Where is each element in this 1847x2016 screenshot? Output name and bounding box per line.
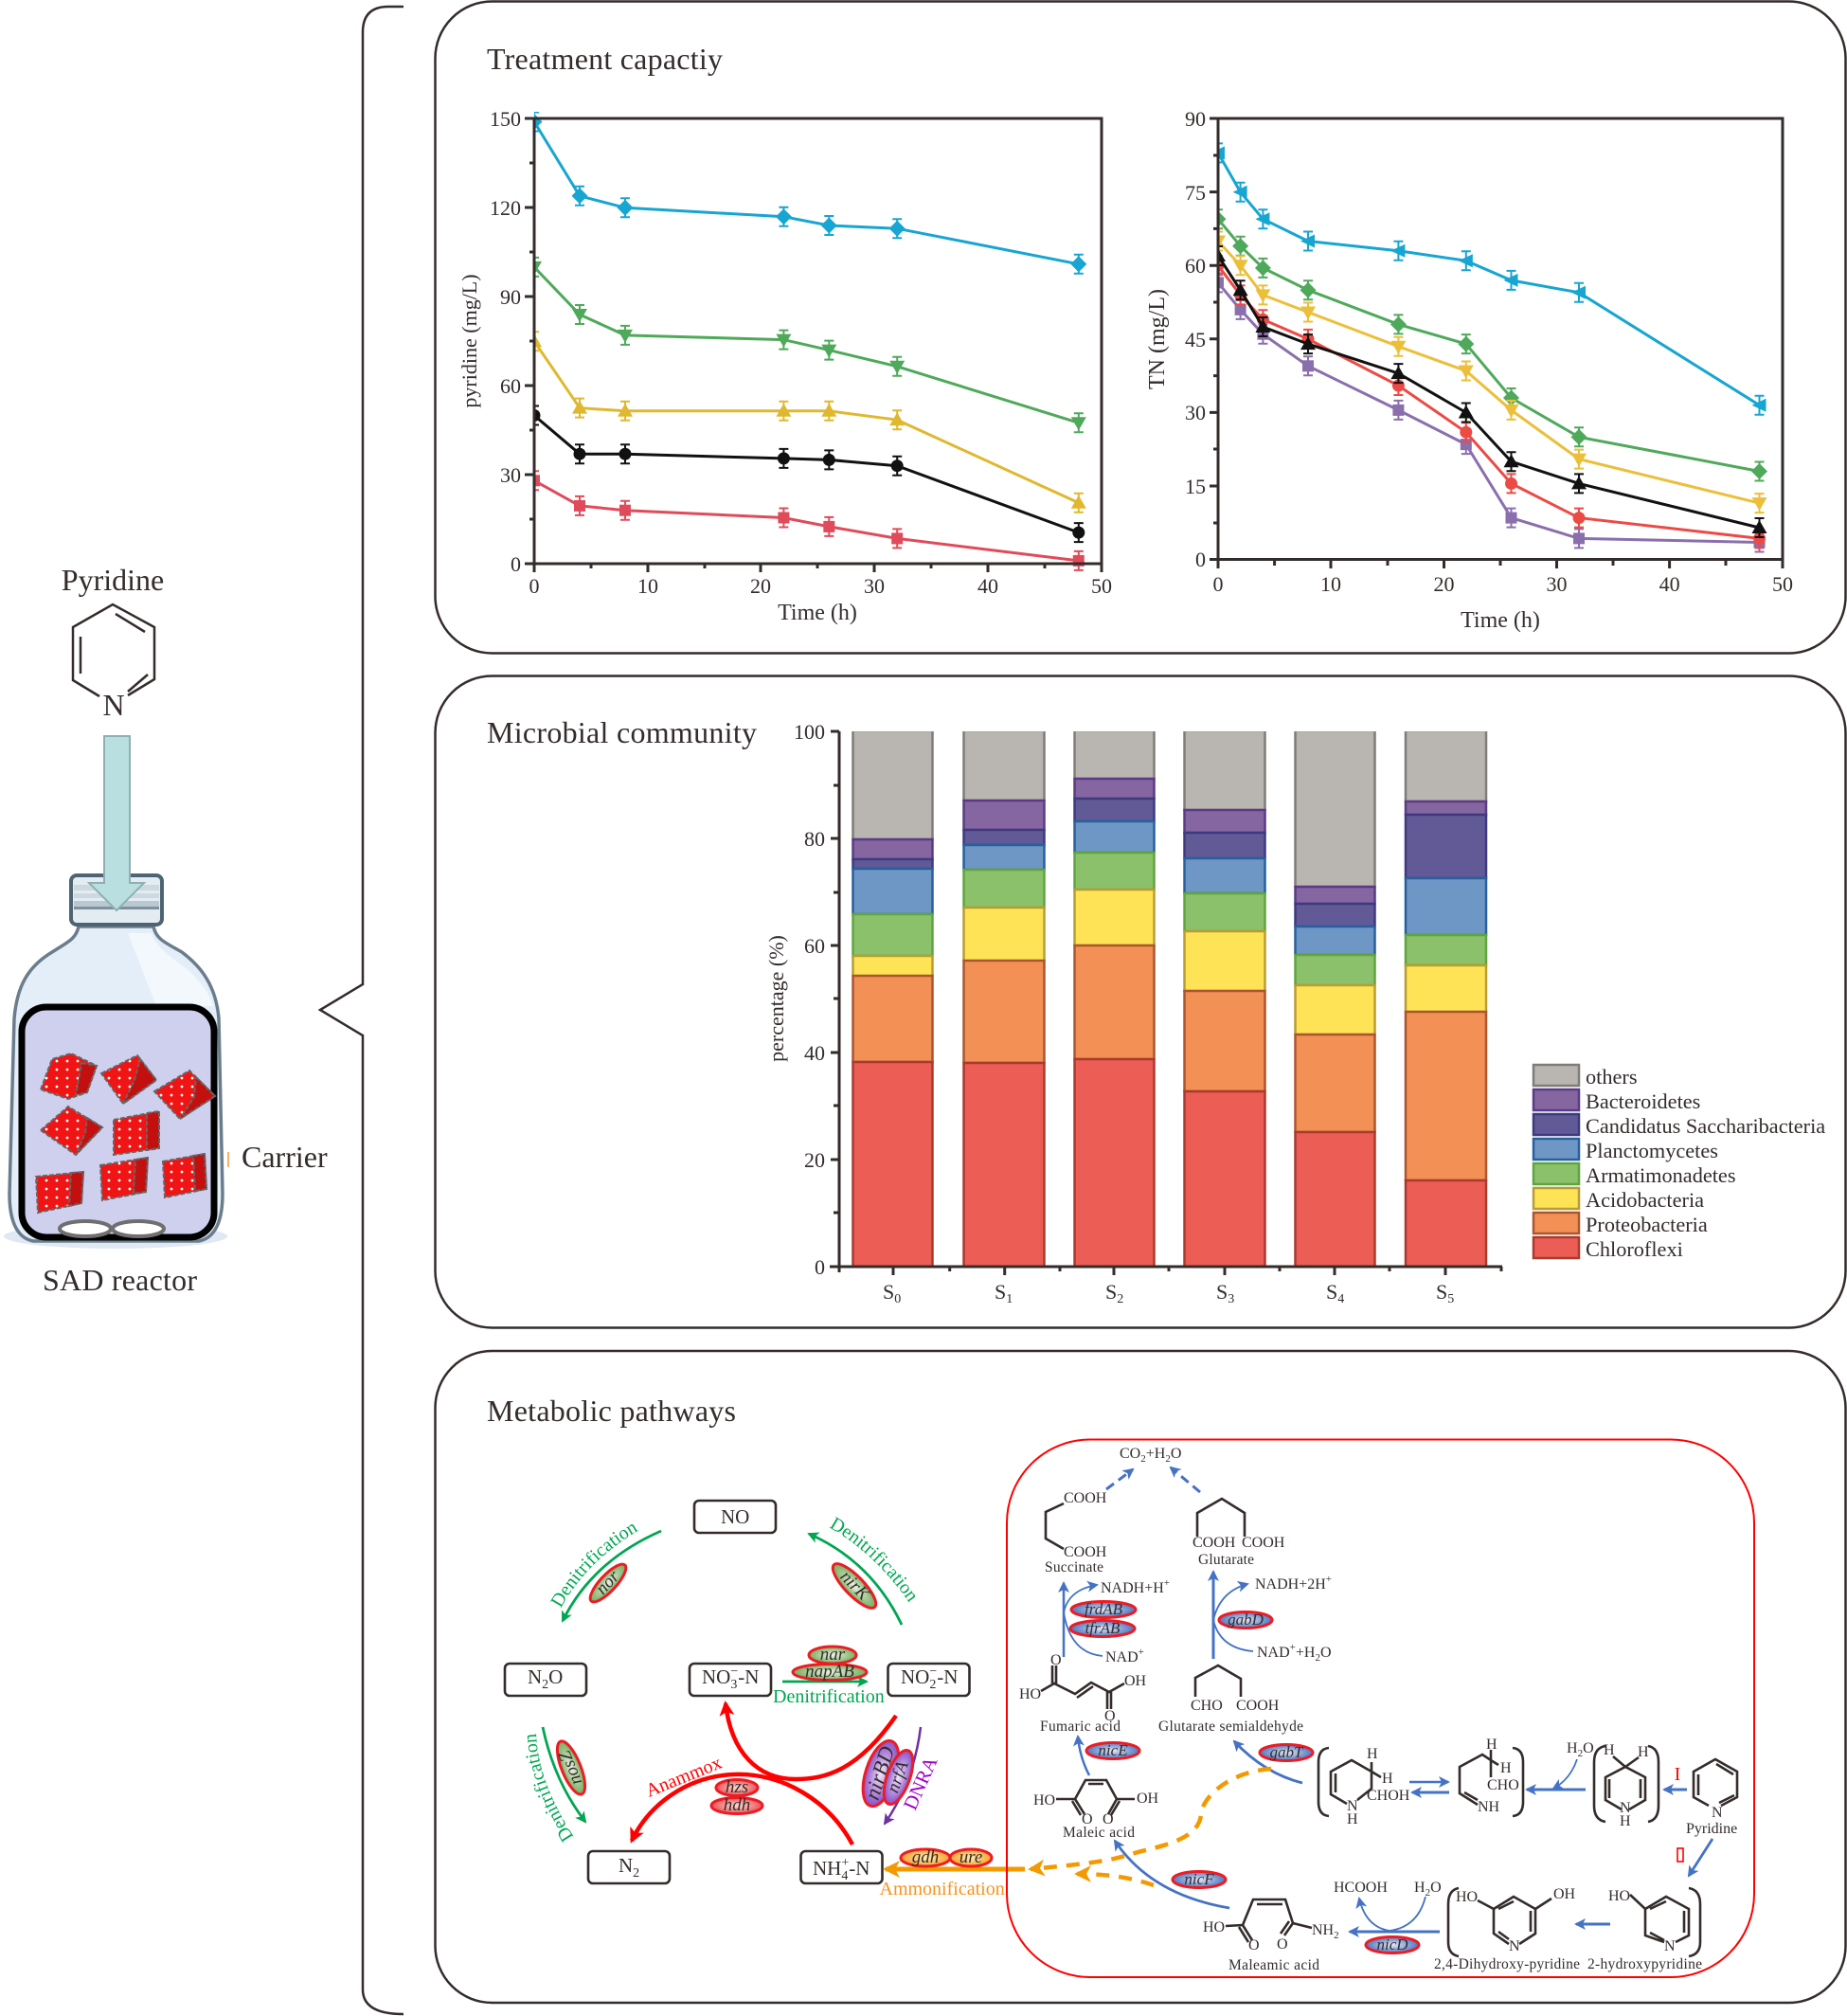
label: denitrification left: Denitrification: [527, 1734, 574, 1844]
box: NO: NO: [721, 1505, 749, 1528]
axis labels: [1145, 107, 1793, 633]
axis labels: S: [995, 1280, 1006, 1304]
enzyme: nicE: nicE: [1098, 1741, 1128, 1759]
enzyme: nosZ: [551, 1737, 591, 1798]
box: NO2-N: −: [929, 1665, 937, 1679]
label: anammox: Anammox: [643, 1753, 725, 1802]
intermediate: dihydropyridine: [1594, 1742, 1659, 1829]
enzyme: gdh: gdh: [912, 1847, 939, 1867]
box: NH4-N: NH: [813, 1857, 841, 1880]
axis labels: 75: [1185, 181, 1206, 205]
molecule: fumaric acid: HO: [1019, 1686, 1041, 1702]
box: NO2-N: [888, 1664, 970, 1696]
chart axes and ticks: [830, 731, 1502, 1275]
enzyme: tfrAB: tfrAB: [1085, 1619, 1121, 1637]
molecule: succinate: COOH: [1064, 1544, 1107, 1560]
label: Pyridine: Pyridine: [62, 563, 164, 597]
enzyme: nirBD: nirBD: [860, 1743, 899, 1803]
axis labels: 30: [500, 463, 521, 487]
box: NH4-N: +: [841, 1856, 849, 1870]
molecule: fumaric acid: O: [1050, 1652, 1062, 1668]
enzyme: frdAB: frdAB: [1085, 1600, 1123, 1618]
legend: others: [1586, 1065, 1637, 1089]
axis labels: 0: [511, 552, 521, 576]
axis labels: 30: [864, 574, 885, 598]
axis labels: pyridine (mg/L): [457, 274, 481, 408]
molecule: glutarate semialdehyde: Glutarate semialdehyde: [1158, 1719, 1303, 1735]
molecule: glutarate: [1192, 1499, 1285, 1568]
step: fumaric acid to succinate: NADH+H: [1101, 1580, 1164, 1596]
box: NO3-N: 3: [730, 1678, 737, 1692]
axis labels: 30: [1185, 401, 1206, 424]
arrow: to glutarate semialdehyde: [1234, 1741, 1302, 1783]
intermediate: dihydropyridine: H: [1604, 1742, 1615, 1758]
arrow: pathway I: [1664, 1764, 1687, 1790]
box: NO3-N: [690, 1664, 771, 1696]
arrow: NO2 to NO: [809, 1534, 902, 1625]
axis labels: 60: [804, 934, 825, 958]
chart: pyridine concentration over time: [457, 107, 1112, 625]
molecule: glutarate: COOH: [1242, 1535, 1285, 1551]
arrows: dashed to CO2: [1106, 1467, 1200, 1492]
label: denitrification centre: Denitrification: [773, 1686, 885, 1707]
molecule: glutarate: COOH: [1192, 1535, 1236, 1551]
series: black: [1210, 246, 1767, 537]
molecule: fumaric acid: Fumaric acid: [1040, 1719, 1121, 1735]
arrow: ammonification: [886, 1866, 1025, 1872]
molecule: maleamic acid: O: [1248, 1937, 1260, 1953]
intermediate: open chain: H: [1500, 1760, 1512, 1776]
nitrogen cycle: [504, 1499, 1025, 1899]
series: green: [527, 258, 1086, 432]
molecule: maleic acid: O: [1082, 1811, 1093, 1827]
molecule: maleic acid: Maleic acid: [1063, 1825, 1135, 1841]
bar: S2: [1074, 730, 1154, 1267]
enzyme: nor: nor: [592, 1566, 624, 1598]
label: denitrification top left: Denitrification: [549, 1524, 638, 1609]
molecule: succinate: [1045, 1490, 1107, 1575]
arrow: hydration step: O: [1583, 1740, 1594, 1756]
arrows: equilibrium: [1409, 1782, 1449, 1792]
enzyme: nirBD: [856, 1737, 906, 1810]
intermediate: hydroxy dihydropyridine: H: [1367, 1746, 1378, 1762]
enzyme: nicD: nicD: [1376, 1935, 1408, 1953]
box: NO: [694, 1501, 776, 1533]
enzyme: gabT: [1260, 1743, 1313, 1761]
axis labels: 4: [1337, 1292, 1344, 1306]
step: fumaric acid to succinate: +: [1164, 1577, 1170, 1589]
step: glutarate semialdehyde to glutarate: [1213, 1572, 1332, 1664]
step: glutarate semialdehyde to glutarate: NAD: [1257, 1645, 1290, 1661]
arrow: anammox NO2 to NO3: [726, 1703, 896, 1779]
axis labels: 15: [1185, 475, 1206, 498]
chart frame and ticks: [525, 118, 1102, 572]
bar: S3: [1184, 730, 1265, 1267]
axis labels: S: [1105, 1280, 1117, 1304]
label: Carrier: Carrier: [242, 1140, 328, 1174]
axis labels: 45: [1185, 328, 1206, 351]
axis labels: 1: [1006, 1292, 1013, 1306]
step: glutarate semialdehyde to glutarate: +H: [1296, 1645, 1316, 1661]
series: yellow: [527, 332, 1086, 513]
arrow: DNRA: [885, 1727, 921, 1824]
axis labels: 60: [500, 374, 521, 398]
axis labels: 90: [500, 285, 521, 309]
molecule: 2,4-dihydroxypyridine: N: [1509, 1938, 1520, 1954]
enzyme: nor: [583, 1557, 632, 1608]
axis labels: 80: [804, 827, 825, 851]
series: red: [1212, 256, 1766, 548]
icon: pyridine molecule: [73, 604, 154, 722]
enzyme: nosZ: nosZ: [555, 1748, 586, 1788]
arrow: N2O to N2: [543, 1727, 585, 1822]
step: fumaric acid to succinate: [1064, 1577, 1170, 1665]
heading: treatment capacity: Treatment capactiy: [487, 42, 723, 76]
pyridine degradation box: [1007, 1440, 1754, 1977]
chart frame and ticks: [1210, 118, 1783, 568]
enzyme: nrfA: nrfA: [883, 1758, 913, 1795]
intermediate: hydroxy dihydropyridine: H: [1382, 1771, 1393, 1787]
legend: Proteobacteria: [1586, 1213, 1708, 1236]
arrow: pathway II: [1677, 1839, 1713, 1876]
axis labels: 50: [1772, 572, 1793, 596]
step: ring opening: 2: [1426, 1887, 1430, 1899]
icon: pyridine molecule: N: [102, 688, 125, 722]
arrow: hydroxylation: [1576, 1923, 1610, 1925]
box: NH4-N: 4: [841, 1869, 848, 1883]
enzyme: nicF: nicF: [1184, 1870, 1214, 1888]
axis labels: 0: [894, 1292, 901, 1306]
axis labels: 90: [1185, 107, 1206, 131]
enzyme: napAB: [793, 1662, 867, 1682]
panel: metabolic pathways: [434, 1349, 1847, 2005]
series: red: [529, 471, 1085, 570]
legend: Bacteroidetes: [1586, 1089, 1700, 1113]
box: N2: 2: [633, 1866, 639, 1881]
box: N2O: [505, 1664, 586, 1696]
axis labels: 60: [1185, 254, 1206, 278]
intermediate: open chain: CHO: [1487, 1777, 1519, 1793]
molecule: 2-hydroxypyridine: HO: [1608, 1888, 1630, 1904]
intermediate: dihydropyridine: H: [1638, 1744, 1649, 1760]
molecule: maleamic acid: HO: [1203, 1919, 1225, 1935]
arrow: pathway I: I: [1675, 1764, 1680, 1785]
enzyme: nicF: [1173, 1870, 1226, 1888]
molecule: maleic acid: [1033, 1780, 1159, 1841]
enzyme: nar: [809, 1645, 856, 1665]
series: yellow: [1210, 231, 1767, 513]
arrow: NO3 to NO2: [782, 1681, 867, 1683]
molecule: maleic acid: O: [1103, 1811, 1114, 1827]
axis labels: S: [883, 1280, 894, 1304]
arrows: dashed ammonia release: [1031, 1769, 1271, 1885]
intermediate: dihydropyridine: N: [1620, 1800, 1631, 1816]
bar: S4: [1296, 730, 1375, 1267]
intermediate: hydroxy dihydropyridine: [1318, 1746, 1410, 1827]
icon: carriers: [36, 1053, 215, 1213]
enzyme: hzs: hzs: [726, 1777, 748, 1797]
box: N2O: N: [528, 1665, 542, 1688]
axis labels: S: [1326, 1280, 1337, 1304]
axis labels: 5: [1447, 1292, 1454, 1306]
molecule: 2,4-dihydroxypyridine: [1434, 1886, 1580, 1972]
molecule: fumaric acid: [1019, 1652, 1147, 1735]
panel: SAD reactor: [4, 563, 328, 1297]
molecule: pyridine: N: [1712, 1805, 1723, 1821]
intermediate: hydroxy dihydropyridine: CHOH: [1367, 1788, 1410, 1804]
molecule: fumaric acid: OH: [1124, 1673, 1147, 1689]
molecule: maleamic acid: NH: [1312, 1922, 1334, 1938]
bar: S1: [964, 730, 1044, 1267]
heading: metabolic pathways: Metabolic pathways: [487, 1394, 736, 1428]
molecule: maleic acid: OH: [1137, 1791, 1159, 1807]
enzyme: nar: nar: [820, 1645, 846, 1665]
series: black: [529, 405, 1085, 542]
molecule: pyridine: Pyridine: [1686, 1821, 1737, 1837]
enzyme: ure: ure: [959, 1847, 982, 1867]
molecule: fumaric acid: O: [1104, 1708, 1116, 1724]
chart: TN concentration over time: [1145, 107, 1793, 633]
product: CO2 + H2O: CO: [1120, 1446, 1140, 1462]
stacked bar chart: [764, 720, 1502, 1306]
step: ring opening: HCOOH: [1334, 1880, 1388, 1896]
box: NO2-N: 2: [929, 1678, 936, 1692]
axis labels: 0: [529, 574, 540, 598]
label: DNRA: DNRA: [900, 1754, 942, 1813]
box: NH4-N: -N: [849, 1857, 870, 1880]
axis labels: 40: [804, 1041, 825, 1065]
axis labels: 20: [1434, 572, 1455, 596]
enzyme: napAB: napAB: [805, 1662, 854, 1682]
intermediate: dihydropyridine: H: [1620, 1813, 1631, 1829]
step: ring opening: H: [1414, 1880, 1426, 1896]
product: CO2 + H2O: +H: [1146, 1446, 1166, 1462]
heading: microbial community: Microbial community: [487, 715, 757, 749]
product: CO2 + H2O: 2: [1140, 1453, 1146, 1465]
box: NO2-N: -N: [937, 1665, 958, 1688]
intermediate: open chain: [1460, 1737, 1523, 1816]
molecule: pyridine: [1686, 1759, 1737, 1837]
axis labels: 0: [1212, 572, 1224, 596]
molecule: glutarate semialdehyde: COOH: [1236, 1698, 1280, 1714]
molecule: 2-hydroxypyridine: 2-hydroxypyridine: [1587, 1956, 1702, 1972]
axis labels: 10: [637, 574, 658, 598]
axis labels: 40: [977, 574, 998, 598]
molecule: maleamic acid: O: [1277, 1936, 1288, 1953]
panel: treatment capacity: [436, 2, 1845, 654]
arrow: hydration step: [1527, 1740, 1594, 1790]
enzyme: gdh: [901, 1847, 950, 1867]
arrow: anammox NH4 to N2: [632, 1774, 852, 1845]
molecule: maleic acid: HO: [1033, 1792, 1055, 1809]
axis labels: 0: [815, 1255, 825, 1279]
axis labels: S: [1216, 1280, 1228, 1304]
step: ring opening: O: [1430, 1880, 1442, 1896]
step: glutarate semialdehyde to glutarate: 2: [1315, 1652, 1320, 1664]
enzyme: ure: [950, 1847, 992, 1867]
axis labels: 150: [490, 107, 521, 131]
panel: microbial community: [436, 676, 1845, 1328]
box: NO3-N: -N: [738, 1665, 759, 1688]
enzyme: gabD: gabD: [1228, 1611, 1264, 1629]
molecule: glutarate semialdehyde: [1158, 1665, 1303, 1735]
box: N2O: 2: [542, 1678, 548, 1692]
axis labels: 10: [1320, 572, 1341, 596]
product: CO2 + H2O: 2: [1165, 1453, 1171, 1465]
axis labels: [457, 107, 1112, 625]
enzyme: nrfA: [878, 1747, 919, 1808]
axis labels: 20: [750, 574, 771, 598]
step: glutarate semialdehyde to glutarate: +: [1290, 1642, 1296, 1653]
molecule: maleamic acid: 2: [1334, 1930, 1339, 1941]
box: N2: N: [619, 1854, 633, 1877]
enzyme: nirK: nirK: [836, 1567, 874, 1605]
arrow: pyridine feed: [89, 736, 144, 910]
enzyme: hzs: [716, 1777, 758, 1797]
legend: [1533, 1065, 1825, 1261]
arrow: maleamic acid to maleic acid: [1115, 1841, 1229, 1908]
box: NO3-N: NO: [702, 1665, 730, 1688]
molecule: 2-hydroxypyridine: N: [1664, 1938, 1676, 1954]
label: SAD reactor: SAD reactor: [43, 1263, 197, 1297]
series: blue: [527, 112, 1086, 274]
step: glutarate semialdehyde to glutarate: +: [1326, 1574, 1332, 1585]
box: NH4-N: [801, 1851, 883, 1883]
legend: Acidobacteria: [1586, 1188, 1704, 1212]
intermediate: open chain: NH: [1478, 1799, 1500, 1815]
series: blue: [1210, 143, 1766, 415]
axis labels: 3: [1228, 1292, 1234, 1306]
axis labels: 50: [1091, 574, 1112, 598]
box: NO2-N: NO: [901, 1665, 929, 1688]
product: CO2 + H2O: O: [1171, 1446, 1181, 1462]
axis labels: 20: [804, 1148, 825, 1172]
axis labels: 40: [1659, 572, 1680, 596]
arrow: NO to N2O: [563, 1531, 661, 1621]
axis labels: Time (h): [778, 601, 857, 625]
box: N2: [588, 1851, 670, 1883]
left bracket callout: [320, 7, 403, 2014]
molecule: 2,4-dihydroxypyridine: 2,4-Dihydroxy-pyridine: [1434, 1956, 1580, 1972]
intermediate: hydroxy dihydropyridine: N: [1347, 1798, 1358, 1814]
legend: Candidatus Saccharibacteria: [1586, 1114, 1825, 1138]
arrow: hydration step: 2: [1578, 1748, 1583, 1759]
series: green: [1210, 209, 1767, 480]
molecule: glutarate semialdehyde: CHO: [1191, 1698, 1223, 1714]
box: N2O: O: [548, 1665, 563, 1688]
box: NO3-N: −: [730, 1665, 738, 1679]
label: ammonification: Ammonification: [879, 1879, 1005, 1899]
axis labels: 30: [1546, 572, 1567, 596]
molecule: succinate: COOH: [1064, 1490, 1107, 1506]
intermediate: open chain: H: [1486, 1737, 1497, 1753]
molecule: glutarate: Glutarate: [1198, 1552, 1254, 1568]
enzyme: nirK: [827, 1557, 882, 1613]
legend: Chloroflexi: [1586, 1237, 1683, 1261]
axis labels: percentage (%): [764, 935, 788, 1062]
label: denitrification top right: Denitrification: [830, 1517, 915, 1603]
bar: S5: [1406, 730, 1486, 1267]
enzyme: hdh: hdh: [724, 1795, 750, 1815]
molecule: maleamic acid: Maleamic acid: [1228, 1957, 1319, 1973]
axis labels: S: [1436, 1280, 1447, 1304]
axis labels: [764, 720, 1454, 1306]
molecule: 2,4-dihydroxypyridine: HO: [1456, 1889, 1478, 1905]
bar: S0: [852, 730, 932, 1267]
enzyme: gabT: gabT: [1270, 1743, 1304, 1761]
step: maleic acid to fumaric acid: [1078, 1737, 1139, 1775]
step: ring opening: [1334, 1880, 1442, 1953]
legend: Planctomycetes: [1586, 1139, 1718, 1162]
axis labels: 2: [1117, 1292, 1123, 1306]
molecule: 2-hydroxypyridine: [1587, 1888, 1702, 1972]
step: fumaric acid to succinate: NAD: [1105, 1649, 1139, 1665]
step: glutarate semialdehyde to glutarate: NADH+2H: [1255, 1576, 1326, 1593]
axis labels: 120: [490, 196, 521, 220]
legend: Armatimonadetes: [1586, 1163, 1736, 1187]
step: glutarate semialdehyde to glutarate: O: [1320, 1645, 1332, 1661]
axis labels: Time (h): [1461, 608, 1540, 633]
axis labels: TN (mg/L): [1145, 289, 1170, 389]
axis labels: 100: [794, 720, 825, 744]
molecule: 2,4-dihydroxypyridine: OH: [1553, 1886, 1576, 1902]
step: fumaric acid to succinate: +: [1139, 1647, 1144, 1658]
icon: reactor bottle: [4, 875, 227, 1249]
arrow: hydration step: H: [1567, 1740, 1578, 1756]
series: purple: [1212, 273, 1766, 551]
enzyme: hdh: [711, 1795, 762, 1815]
axis labels: 0: [1195, 548, 1206, 571]
molecule: maleamic acid: [1203, 1899, 1339, 1973]
intermediate: hydroxy dihydropyridine: H: [1347, 1811, 1358, 1827]
molecule: succinate: Succinate: [1045, 1559, 1103, 1575]
